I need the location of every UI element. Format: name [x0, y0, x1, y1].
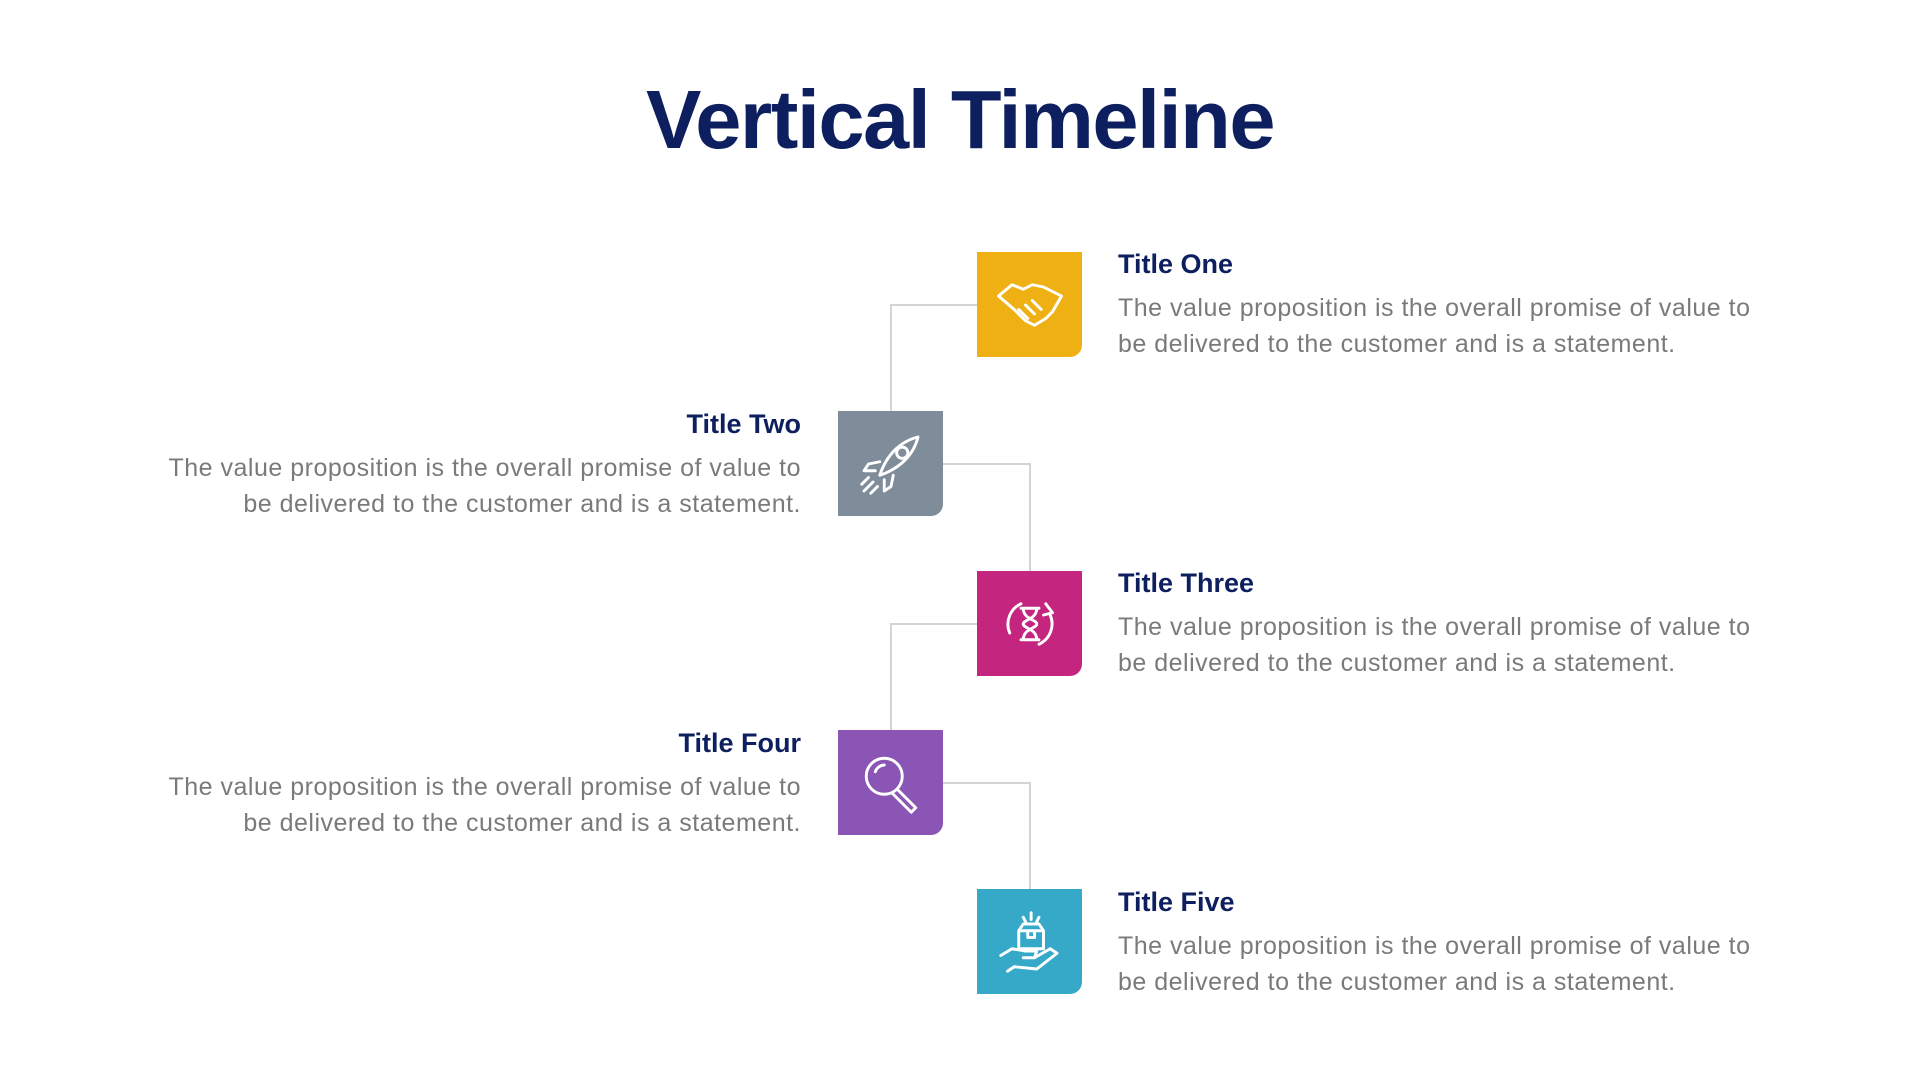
text: title five: Title Five [1118, 887, 1235, 917]
connectors [890, 304, 1031, 889]
text: title one [1118, 249, 1750, 358]
text: title three [1118, 568, 1750, 677]
text: title three: The value proposition is the overall promise of value to [1118, 613, 1750, 641]
text: title one: The value proposition is the overall promise of value to [1118, 294, 1750, 322]
text: title four: The value proposition is the overall promise of value to [168, 773, 801, 801]
text: title four: be delivered to the customer and is a statement. [243, 809, 801, 837]
text: title four: Title Four [678, 728, 801, 758]
icon box: hand with box [977, 889, 1082, 994]
text: title five: The value proposition is the overall promise of value to [1118, 932, 1750, 960]
text: title one: be delivered to the customer and is a statement. [1118, 330, 1676, 358]
text: title two: Title Two [686, 409, 801, 439]
title: Vertical Timeline [646, 73, 1274, 166]
text: title two [168, 409, 801, 518]
text: title three: be delivered to the customer and is a statement. [1118, 649, 1676, 677]
text: title two: The value proposition is the overall promise of value to [168, 454, 801, 482]
text: title five: be delivered to the customer and is a statement. [1118, 968, 1676, 996]
icon box: handshake [977, 252, 1082, 357]
text: title two: be delivered to the customer and is a statement. [243, 490, 801, 518]
icon box: magnifier [838, 730, 943, 835]
text: title one: Title One [1118, 249, 1233, 279]
text: title five [1118, 887, 1750, 996]
text: title four [168, 728, 801, 837]
icon box: rocket [838, 411, 943, 516]
text: title three: Title Three [1118, 568, 1254, 598]
icon box: hourglass cycle [977, 571, 1082, 676]
